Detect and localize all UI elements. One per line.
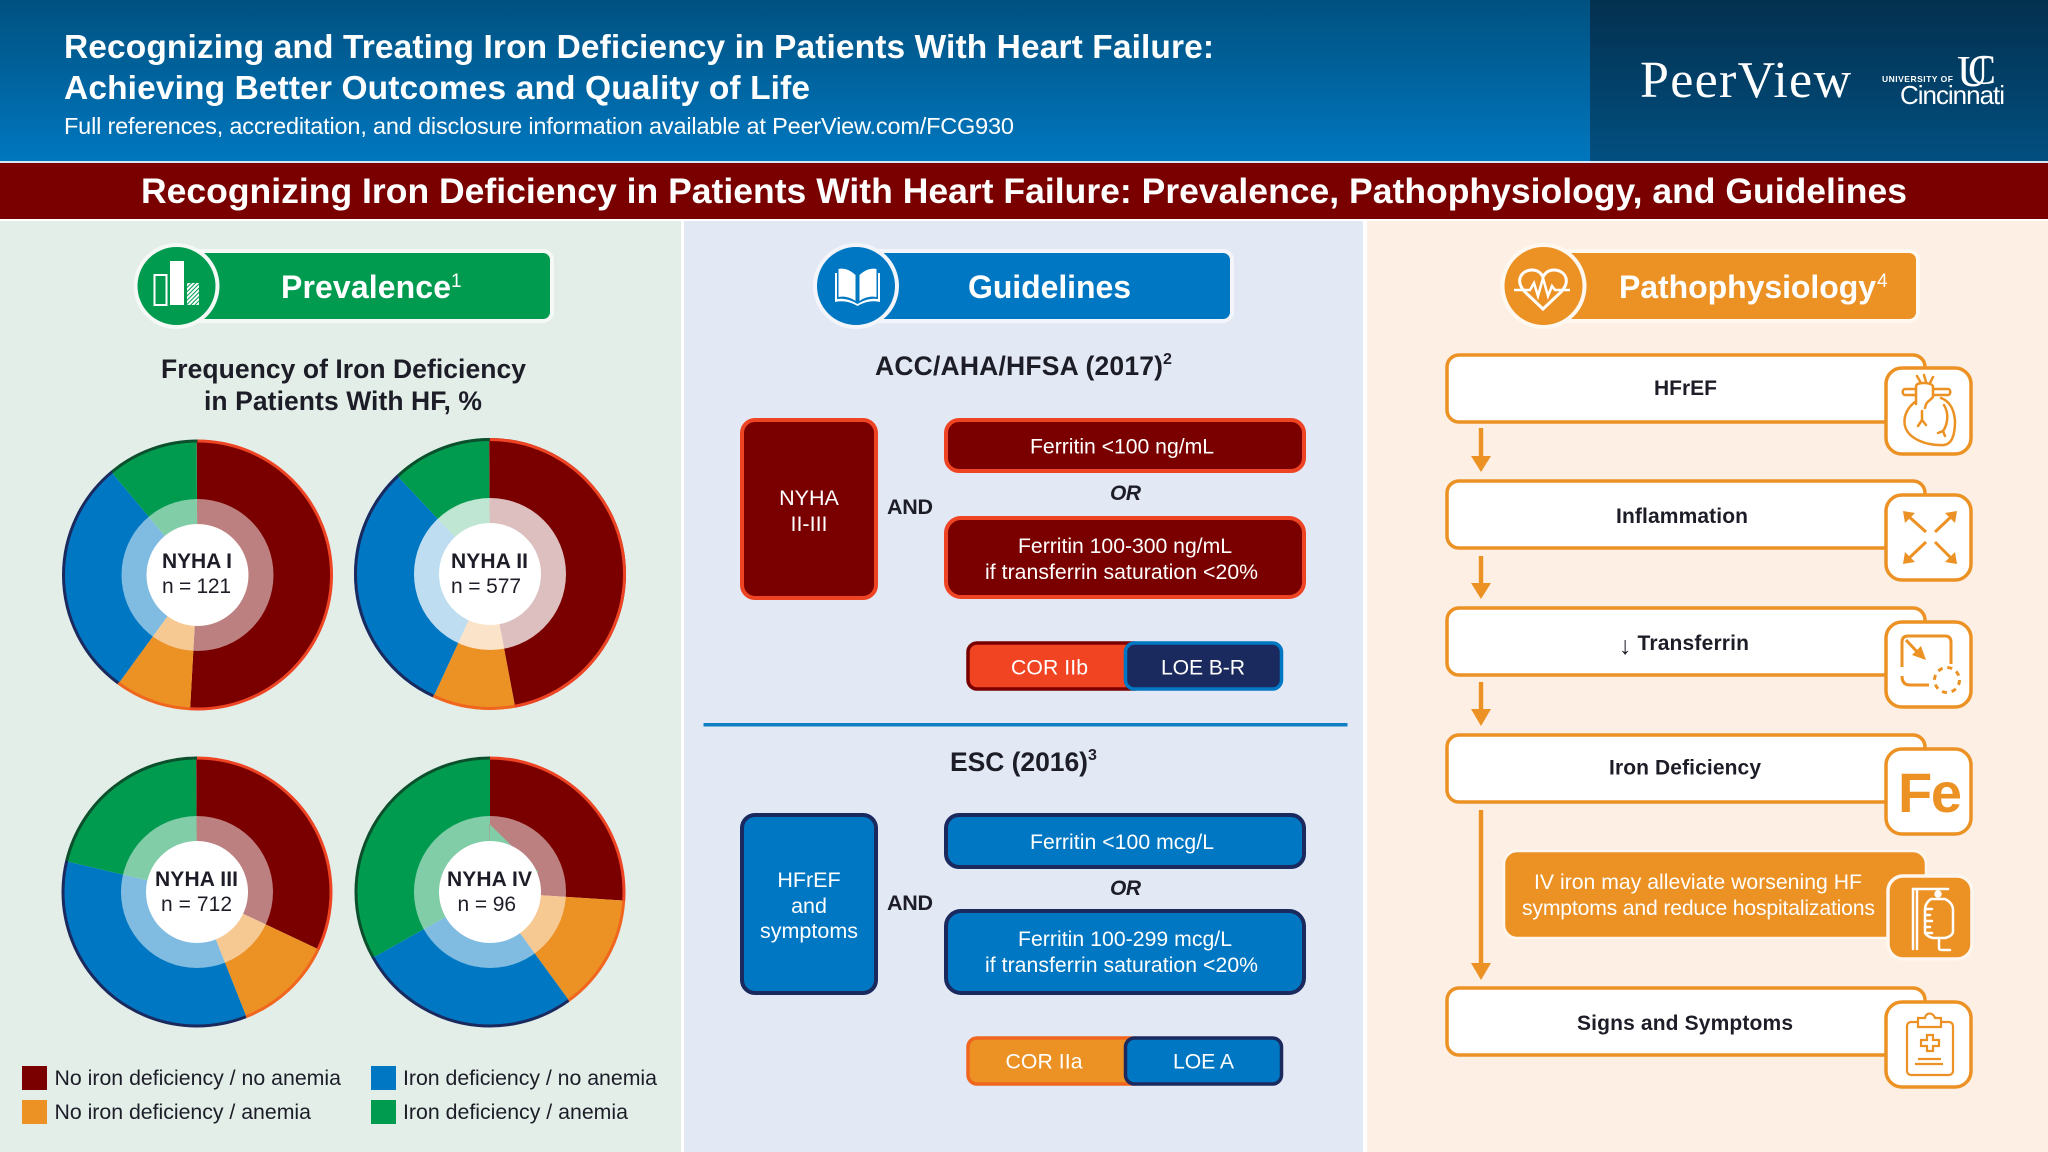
box: ferritin 100-299 mcg/L [946, 911, 1304, 993]
panel: guidelines [684, 221, 1363, 1152]
heading: pathophysiology: Pathophysiology [1619, 269, 1876, 305]
main title: Achieving Better Outcomes and Quality of Life [64, 70, 810, 107]
box: NYHA II-III: II-III [790, 512, 828, 536]
box: HFrEF and symptoms: HFrEF [777, 868, 841, 892]
badge: COR IIb / LOE B-R: LOE B-R [1161, 656, 1245, 680]
icon: IV bag [1888, 876, 1972, 959]
badge: COR IIa / LOE A: LOE A [1173, 1050, 1235, 1074]
step: inflammation [1447, 481, 1971, 580]
box: HFrEF and symptoms [742, 815, 876, 993]
box: ferritin 100-300 ng/mL: if transferrin saturation <20% [985, 561, 1258, 584]
step: iron deficiency [1447, 735, 1971, 834]
panel: prevalence [0, 221, 681, 1152]
step: HFrEF: HFrEF [1654, 377, 1717, 400]
step: transferrin [1447, 608, 1971, 707]
heading: ACC/AHA/HFSA: 2 [1163, 351, 1172, 368]
chart title: in Patients With HF, % [204, 386, 482, 416]
logo: University of Cincinnati: C [1968, 48, 1996, 94]
heading: guidelines: Guidelines [968, 269, 1131, 305]
panel: pathophysiology [1367, 221, 2048, 1152]
arrow: inflammation to transferrin [1471, 556, 1491, 599]
heading: ACC/AHA/HFSA: ACC/AHA/HFSA (2017) [875, 351, 1163, 381]
badge: COR IIa / LOE A [968, 1038, 1282, 1084]
badge: COR IIb / LOE B-R [968, 643, 1282, 689]
logo: University of Cincinnati: UNIVERSITY OF [1882, 74, 1953, 84]
logo: University of Cincinnati [1882, 47, 2005, 110]
donut: NYHA III [63, 758, 331, 1026]
donut: NYHA III: n = 712 [161, 893, 232, 916]
section title band: Recognizing Iron Deficiency in Patients With Heart Failure: Prevalence, Pathophysiology, and Guidelines [141, 171, 1907, 211]
logo: PeerView: PeerView [1640, 52, 1851, 109]
donut: NYHA IV: NYHA IV [447, 868, 532, 891]
badge: COR IIb / LOE B-R: COR IIb [1011, 656, 1088, 680]
label: OR: OR [1110, 877, 1142, 900]
box: NYHA II-III: NYHA [779, 486, 840, 510]
heading: pathophysiology: 4 [1877, 271, 1888, 292]
heading: prevalence: 1 [451, 271, 462, 292]
main title: Recognizing and Treating Iron Deficiency in Patients With Heart Failure: [64, 29, 1214, 66]
donut: NYHA IV: n = 96 [458, 893, 516, 916]
donut: NYHA II [356, 440, 624, 708]
chart title: Frequency of Iron Deficiency [161, 354, 526, 384]
legend [22, 1066, 657, 1124]
donut: NYHA II: n = 577 [451, 575, 521, 598]
step: iron deficiency: Iron Deficiency [1609, 756, 1761, 780]
legend: No iron deficiency / anemia [54, 1100, 311, 1124]
donut: NYHA III: NYHA III [155, 868, 238, 891]
heading: prevalence: Prevalence [281, 269, 451, 305]
donut: NYHA I: NYHA I [162, 550, 232, 573]
legend: No iron deficiency / no anemia [54, 1066, 341, 1090]
callout: IV iron: IV iron may alleviate worsening HF [1534, 871, 1862, 894]
box: ferritin 100-299 mcg/L: if transferrin saturation <20% [985, 954, 1258, 977]
arrow: transferrin to iron deficiency [1471, 682, 1491, 726]
badge: COR IIa / LOE A: COR IIa [1006, 1050, 1083, 1074]
icon: heart with ECG [1514, 270, 1570, 309]
callout: IV iron: symptoms and reduce hospitalizations [1522, 897, 1875, 920]
icon: Fe [1886, 749, 1971, 834]
step: transferrin: ↓ [1619, 632, 1632, 660]
step: signs and symptoms [1447, 988, 1971, 1087]
arrow: iron deficiency to signs and symptoms [1471, 810, 1491, 980]
step: transferrin: Transferrin [1638, 632, 1749, 655]
chart title [161, 354, 526, 416]
box: ferritin under 100 mcg/L: Ferritin <100 mcg/L [1030, 831, 1214, 854]
heading: ESC: ESC (2016) [950, 747, 1088, 777]
donut: NYHA II: NYHA II [451, 550, 528, 573]
donut: NYHA IV [356, 758, 624, 1026]
box: ferritin 100-299 mcg/L: Ferritin 100-299 mcg/L [1018, 928, 1232, 951]
box: HFrEF and symptoms: and [791, 894, 827, 918]
legend: Iron deficiency / anemia [403, 1100, 628, 1124]
heading: ESC: 3 [1088, 747, 1097, 764]
box: ferritin under 100 ng/mL: Ferritin <100 ng/mL [1030, 436, 1214, 458]
box: NYHA II-III [742, 420, 876, 598]
heading: prevalence [136, 245, 552, 327]
icon: bar chart [154, 261, 199, 305]
label: AND: AND [887, 891, 933, 915]
donut: NYHA I [64, 441, 332, 709]
icon: Fe: Fe [1898, 761, 1962, 824]
label: OR: OR [1110, 482, 1142, 505]
box: ferritin under 100 mcg/L [946, 815, 1304, 867]
icon: outward arrows [1886, 495, 1971, 580]
step: inflammation: Inflammation [1616, 505, 1748, 528]
arrow: HFrEF to inflammation [1471, 428, 1491, 472]
references line: Full references, accreditation, and disclosure information available at PeerView.com/FCG930 [64, 113, 1014, 139]
icon: clipboard [1886, 1002, 1971, 1087]
header banner [0, 0, 2048, 161]
icon: heart [1886, 368, 1971, 454]
box: ferritin 100-300 ng/mL [946, 518, 1304, 597]
heading: pathophysiology [1502, 245, 1918, 327]
box: HFrEF and symptoms: symptoms [760, 919, 858, 943]
heading: guidelines [815, 245, 1232, 327]
callout: IV iron [1504, 851, 1972, 959]
step: HFrEF [1447, 355, 1971, 454]
logo: University of Cincinnati: Cincinnati [1900, 80, 2005, 110]
box: ferritin under 100 ng/mL [946, 420, 1304, 471]
box: ferritin 100-300 ng/mL: Ferritin 100-300 ng/mL [1018, 535, 1232, 558]
label: AND: AND [887, 495, 933, 519]
donut: NYHA I: n = 121 [162, 575, 231, 598]
icon: open book [835, 269, 880, 306]
icon: transferrin square [1886, 622, 1971, 707]
step: signs and symptoms: Signs and Symptoms [1577, 1012, 1793, 1035]
logo: University of Cincinnati: U [1957, 47, 1989, 96]
legend: Iron deficiency / no anemia [403, 1066, 657, 1090]
section title band [0, 163, 2048, 219]
main title [64, 29, 1214, 107]
